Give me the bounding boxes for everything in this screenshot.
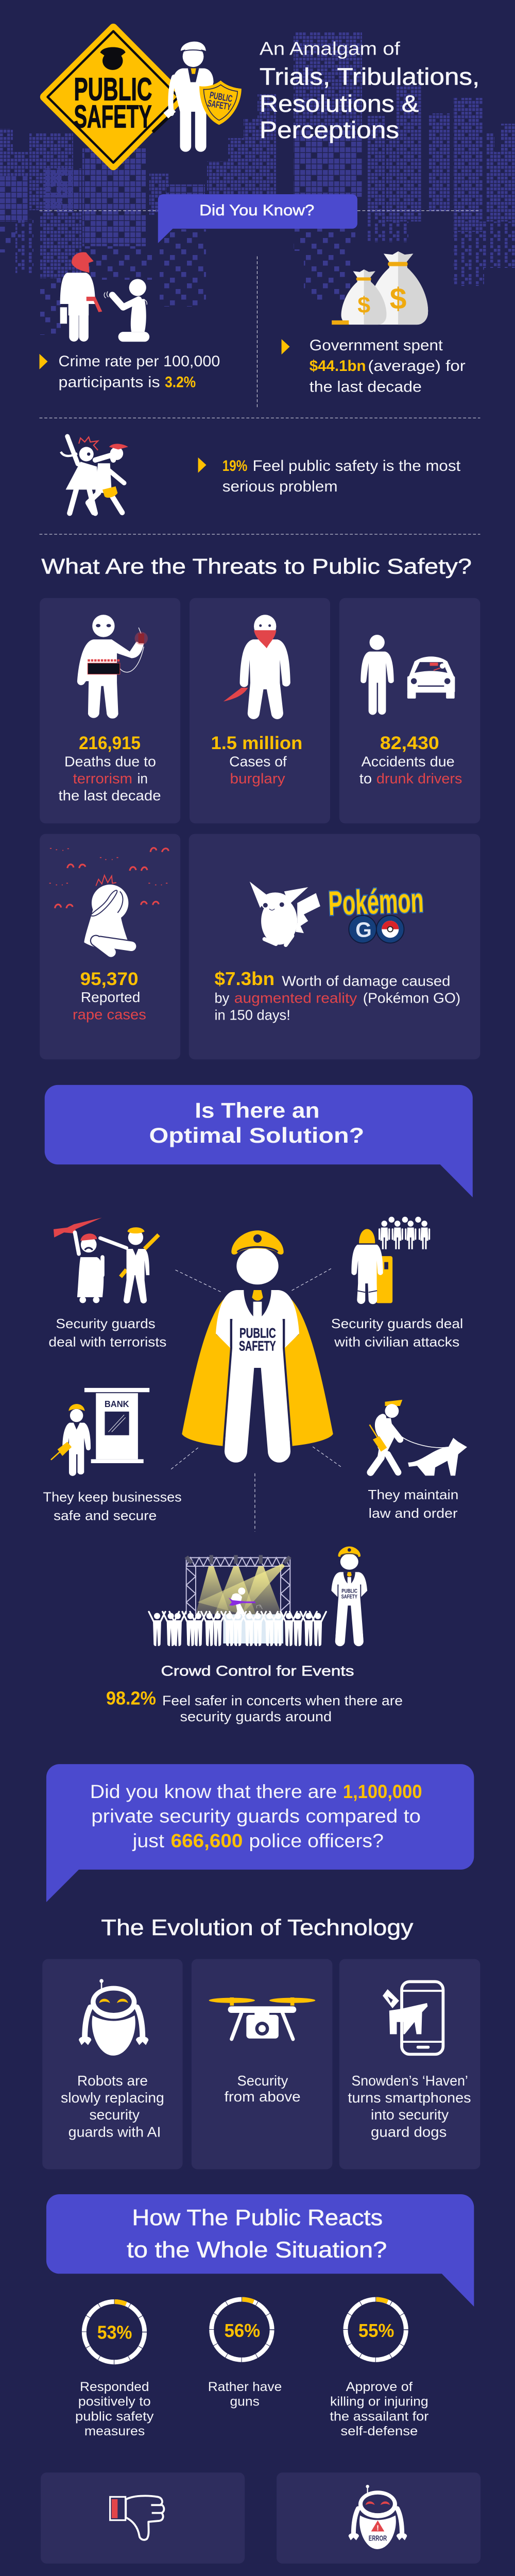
callout: guards vs police: private security guards compared to [91,1806,421,1827]
icon: phone guard dog [383,1981,443,2054]
stat: concert safety: Feel safer in concerts when there are [162,1693,403,1708]
text: positive response: measures [84,2424,145,2438]
logo: pokemon go: G [355,918,372,941]
stat: augmented reality damage: by [214,990,229,1006]
stat: rape cases: Reported [81,989,140,1005]
panel: dislike guards [41,2472,245,2564]
section: crowd control and technology (z4 frame) [42,1663,480,2170]
text: haven app: Snowden’s ‘Haven’ [351,2073,468,2089]
logo: pokemon go [328,882,424,943]
panel: drunk drivers [339,598,480,823]
crowd [149,1612,326,1646]
text: guns: guns [230,2395,260,2409]
callout heading: optimal solution: Is There an [195,1098,320,1123]
guard at concert [331,1547,367,1646]
text: guns [208,2380,282,2409]
stat: burglary [211,733,302,786]
callout heading: public reaction: How The Public Reacts [132,2206,383,2230]
gauge: 55 percent: 55% [358,2320,394,2341]
stat: concert safety [106,1688,403,1724]
text: positive response: Responded [80,2380,149,2394]
icon: guard with shield: PUBLIC [209,89,233,104]
stat: augmented reality damage [214,968,460,1023]
section: header and did you know (z1 frame) [40,28,480,513]
text: government spending: the last decade [310,378,422,395]
text: positive response [75,2380,154,2438]
icon: public safety road sign: PUBLIC [74,72,152,108]
text: robots: slowly replacing [61,2090,164,2106]
title: Resolutions & [260,90,419,117]
stat: rape cases: 95,370 [80,969,139,989]
illustration: caped security guard hero: SAFETY [239,1338,276,1354]
icon: street assault figures [61,436,128,513]
stat: drunk drivers: to [359,770,372,786]
section: threats to public safety (z2 frame) [40,534,480,1059]
gauge: 53 percent: 53% [97,2323,132,2343]
stat: terrorism [59,733,161,804]
icon: robot [79,1979,148,2056]
text: positive response: public safety [75,2409,154,2424]
stage lights [184,1555,291,1564]
icon: camera drone [209,1997,315,2039]
gauge: 56 percent [212,2299,272,2360]
icon: guard confronting terrorist [54,1218,159,1303]
stat: rape cases [73,969,146,1022]
callout: guards vs police: 1,100,000 [343,1781,422,1802]
icon: money bags [332,251,428,325]
callout: guards vs police: Did you know that there are [90,1781,337,1802]
stat: augmented reality damage: $7.3bn [214,968,274,989]
stat: burglary: Cases of [229,753,287,769]
stat: augmented reality damage: (Pokémon GO) [363,990,460,1006]
guitarist [228,1587,262,1614]
panel: rape cases [40,834,180,1059]
icon: money bags: $ [357,293,370,318]
guard chest label [341,1588,357,1600]
gauge: 55 percent [346,2299,406,2360]
stat: terrorism: 216,915 [79,733,141,753]
text: law and order: They maintain [368,1488,458,1502]
icon: public safety road sign [44,28,182,166]
text: self defense: Approve of [346,2380,413,2394]
spotlight beams [196,1564,285,1614]
text: civilian attacks: with civilian attacks [334,1335,459,1350]
stat: drunk drivers: drunk drivers [376,770,462,786]
text: guns: Rather have [208,2380,282,2394]
stat: augmented reality damage: in 150 days! [214,1007,290,1023]
icon: error robot: ERROR [369,2534,387,2543]
panel: robots [42,1959,183,2170]
text: government spending: (average) for [368,358,466,375]
stat: drunk drivers: Accidents due [362,753,455,769]
icon: suicide bomber [77,615,148,719]
icon: masked burglar [224,615,290,719]
title: Perceptions [260,116,399,143]
text: government spending [310,337,466,395]
stat: terrorism: the last decade [59,788,161,804]
icon: robbery at gunpoint [60,252,149,342]
text: civilian attacks [331,1317,463,1350]
text: drones: Security [237,2073,288,2089]
text: crime rate: Crime rate per 100,000 [59,353,220,370]
section: public reaction (z5 frame) [41,2194,480,2564]
text: self defense: the assailant for [330,2409,428,2424]
text: positive response: positively to [78,2395,151,2409]
title: Trials, Tribulations, [260,63,479,90]
stat: burglary: 1.5 million [211,733,302,753]
arrow bullet [282,339,290,354]
text: businesses: safe and secure [54,1509,157,1523]
icon: error robot [349,2485,407,2549]
text: 19 percent: Feel public safety is the most [252,457,461,474]
text: haven app: turns smartphones [348,2090,471,2106]
stat: augmented reality damage: Worth of damage caused [282,973,450,989]
text: drones [225,2073,301,2105]
text: 19 percent: 19% [222,457,247,474]
panel: burglary [190,598,330,823]
stat: terrorism: Deaths due to [64,753,156,769]
icon: public safety road sign: SAFETY [74,98,152,134]
stat: augmented reality damage: augmented reality [234,990,357,1006]
callout heading: public reaction: to the Whole Situation? [127,2238,387,2262]
icon: guard at bank: BANK [105,1399,129,1409]
text: crime rate: 3.2% [165,374,196,391]
arrow bullet [40,354,47,369]
icon: frightened seated figure with eyes [49,848,168,952]
text: terrorists [48,1317,166,1350]
text: crime rate: participants is [59,374,160,391]
callout: guards vs police: police officers? [249,1831,384,1852]
callout: guards vs police [46,1764,474,1902]
panel: augmented reality [189,834,480,1059]
guard chest label: SAFETY [341,1594,357,1600]
section: optimal solution (z3 frame) [43,1085,473,1532]
text: haven app: guard dogs [371,2124,447,2140]
text: government spending: Government spent [310,337,443,354]
callout: guards vs police: just [132,1831,164,1852]
stat: terrorism: in [138,770,148,786]
text: terrorists: Security guards [56,1317,156,1331]
text: haven app [348,2073,471,2140]
icon: riot guard and crowd [351,1217,430,1304]
text: haven app: into security [371,2107,449,2123]
stat: drunk drivers [359,733,462,786]
text: self defense: self-defense [340,2424,418,2438]
text: law and order: law and order [369,1506,458,1521]
heading: evolution of technology: The Evolution of Technology [101,1916,414,1940]
icon: guard at bank [51,1388,149,1476]
text: self defense: killing or injuring [330,2395,428,2409]
logo: pokemon go: Pokémon [328,882,424,923]
icon: guard with shield [153,42,242,152]
illustration: concert stage, crowd and guard [149,1547,367,1646]
stat: rape cases: rape cases [73,1006,146,1022]
stat: concert safety: security guards around [180,1709,332,1724]
text: robots [61,2073,164,2140]
callout: guards vs police: 666,600 [171,1831,243,1852]
text: robots: security [89,2107,140,2123]
guard chest label: PUBLIC [341,1588,357,1595]
callout: did you know [158,194,357,243]
text: law and order [368,1488,458,1521]
stage truss [186,1557,290,1614]
text: 19 percent [222,457,461,495]
panel: drones [192,1959,332,2170]
callout heading: optimal solution: Optimal Solution? [149,1123,364,1147]
gauge: 53 percent [84,2302,145,2362]
icon: thumbs down [110,2496,164,2540]
heading: threats: What Are the Threats to Public Safety? [41,554,472,579]
heading: crowd control: Crowd Control for Events [161,1663,354,1679]
text: self defense [330,2380,428,2438]
text: robots: guards with AI [68,2124,161,2140]
callout heading: optimal solution [45,1085,473,1197]
illustration: caped security guard hero [182,1230,333,1463]
text: drones: from above [225,2089,301,2105]
stat: concert safety: 98.2% [106,1688,156,1709]
icon: pikachu [250,882,320,945]
callout heading: public reaction [46,2194,474,2307]
text: 19 percent: serious problem [222,478,338,495]
icon: guard with shield: SAFETY [207,97,232,112]
icon: error robot: ! [376,2523,379,2532]
gauge: 56 percent: 56% [225,2320,260,2341]
stat: terrorism: terrorism [73,770,132,786]
arrow bullet [198,457,207,473]
panel: haven app [339,1959,480,2170]
text: terrorists: deal with terrorists [48,1335,166,1350]
text: crime rate [59,353,220,391]
panel: ai robots doubts [277,2472,480,2564]
city skyline backdrop [0,32,515,335]
title: An Amalgam of [260,39,400,59]
title [260,39,479,143]
text: civilian attacks: Security guards deal [331,1317,463,1331]
text: businesses [43,1490,182,1523]
text: businesses: They keep businesses [43,1490,182,1505]
callout: did you know: Did You Know? [199,202,314,219]
text: government spending: $44.1bn [310,358,366,375]
text: robots: Robots are [77,2073,148,2089]
icon: pedestrian and car [360,635,455,715]
icon: money bags: $ [390,282,406,316]
illustration: caped security guard hero: PUBLIC [239,1326,276,1341]
stat: burglary: burglary [230,770,285,786]
panel: terrorism [40,598,180,823]
icon: officer with dog [370,1400,467,1476]
stat: drunk drivers: 82,430 [380,733,439,753]
